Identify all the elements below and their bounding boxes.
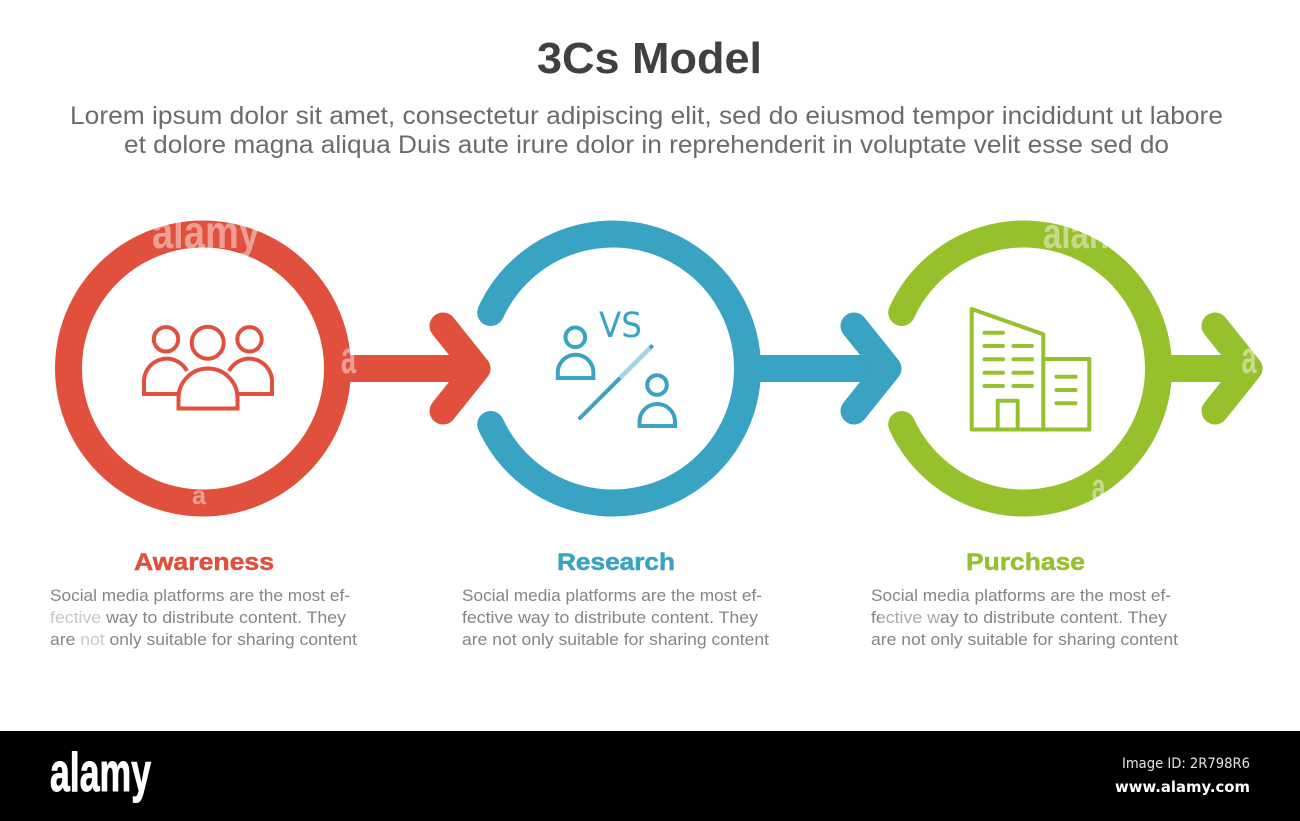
body: research: Social media platforms are the most ef-: [462, 586, 762, 605]
heading: research: Research: [557, 549, 675, 576]
body: awareness: are not only suitable for sharing content: [50, 630, 357, 649]
heading: awareness: Awareness: [134, 549, 274, 576]
footer url: www.alamy.com: [1115, 778, 1250, 796]
body: research: [462, 586, 769, 649]
icon: person versus person: VS: [599, 306, 642, 346]
body: awareness: [50, 586, 357, 649]
icon: office buildings: [972, 309, 1089, 430]
heading: purchase: Purchase: [966, 549, 1085, 576]
text block: awareness: [50, 549, 357, 649]
watermark overlays: alan: [1043, 209, 1109, 258]
icon: person versus person: [558, 306, 675, 426]
subtitle text block: [70, 102, 1223, 159]
footer logo: alamy: [50, 741, 151, 803]
panel: awareness stage: [68, 234, 477, 503]
body: purchase: are not only suitable for sharing content: [871, 630, 1178, 649]
arrow: research to purchase: [750, 326, 888, 411]
footer bar: [0, 731, 1300, 821]
text block: research: [462, 549, 769, 649]
title: 3Cs Model: [537, 34, 762, 83]
ring: purchase: [902, 234, 1158, 503]
watermark overlays: a: [341, 332, 357, 383]
arrow: purchase outgoing: [1160, 326, 1249, 411]
panel: research stage: [491, 234, 888, 503]
body: purchase: [871, 586, 1178, 649]
watermark overlays: a: [1242, 332, 1257, 383]
subtitle text block: et dolore magna aliqua Duis aute irure dolor in reprehenderit in voluptate velit esse sed do: [124, 131, 1169, 159]
ring: research: [491, 234, 747, 503]
watermark overlays: alamy: [152, 206, 260, 258]
body: purchase: fective way to distribute content. They: [871, 608, 1168, 627]
body: research: are not only suitable for sharing content: [462, 630, 769, 649]
subtitle text block: Lorem ipsum dolor sit amet, consectetur adipiscing elit, sed do eiusmod tempor incididunt ut labore: [70, 102, 1223, 130]
body: awareness: Social media platforms are the most ef-: [50, 586, 350, 605]
panel: purchase stage: [902, 234, 1249, 503]
body: purchase: Social media platforms are the most ef-: [871, 586, 1171, 605]
body: awareness: fective way to distribute content. They: [50, 608, 347, 627]
watermark overlays: [50, 206, 1257, 649]
watermark overlays: a: [1092, 467, 1106, 509]
icon: group of people: [144, 327, 272, 408]
arrow: awareness to research: [340, 326, 477, 411]
body: research: fective way to distribute content. They: [462, 608, 759, 627]
footer image id: Image ID: 2R798R6: [1122, 756, 1250, 772]
ring: awareness: [68, 234, 338, 503]
text block: purchase: [871, 549, 1178, 649]
watermark overlays: a: [192, 480, 207, 510]
